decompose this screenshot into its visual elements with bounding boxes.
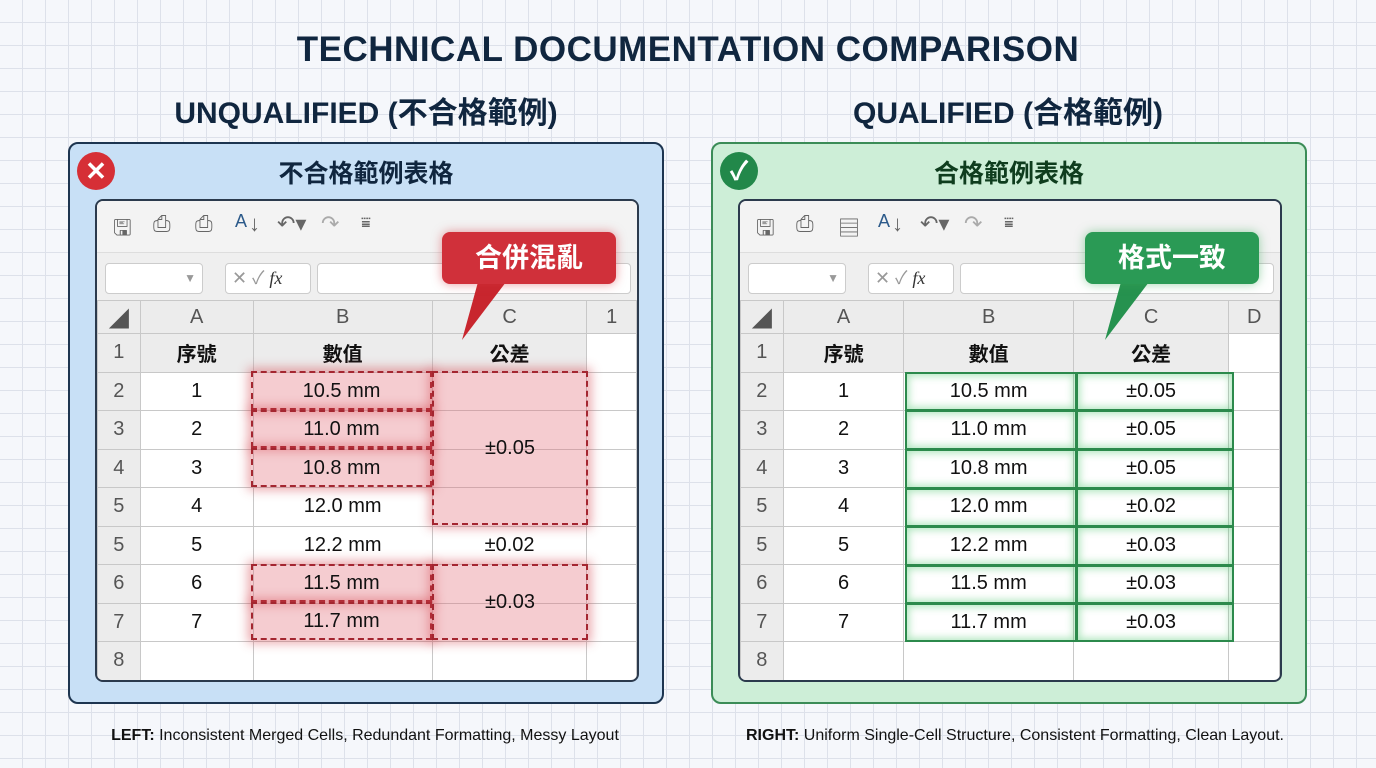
panel: unqualified bbox=[68, 142, 664, 704]
formula bar bbox=[97, 253, 637, 300]
highlight: uniform cells bbox=[905, 372, 1234, 642]
toolbar: ⎙ bbox=[796, 211, 814, 236]
highlight: messy merged cells: 10.8 mm bbox=[303, 457, 380, 479]
table grid: 12.2 mm bbox=[950, 534, 1028, 556]
table grid: 5 bbox=[756, 495, 767, 517]
table grid: 1 bbox=[191, 380, 202, 402]
table grid: 12.0 mm bbox=[304, 495, 382, 517]
table grid: 11.7 mm bbox=[950, 611, 1027, 633]
toolbar bbox=[97, 201, 637, 253]
spreadsheet: qualified bbox=[738, 199, 1282, 682]
formula bar: ✕ ✓ fx bbox=[232, 268, 282, 288]
table grid: 6 bbox=[756, 572, 767, 594]
table grid: 6 bbox=[191, 572, 202, 594]
callout: merge chaos bbox=[435, 225, 623, 340]
table grid: 數值 bbox=[969, 344, 1009, 366]
table grid: 1 bbox=[113, 341, 124, 363]
highlight: messy merged cells bbox=[240, 360, 598, 651]
toolbar: ↓ bbox=[892, 211, 903, 236]
caption: right: RIGHT: Uniform Single-Cell Structure, Consistent Formatting, Clean Layout. bbox=[746, 727, 1284, 744]
table grid: 2 bbox=[113, 380, 124, 402]
highlight: messy merged cells: ±0.03 bbox=[485, 591, 535, 613]
table grid: 4 bbox=[756, 457, 767, 479]
table grid: 7 bbox=[191, 611, 202, 633]
table grid: ±0.03 bbox=[1126, 572, 1176, 594]
table grid: 7 bbox=[756, 611, 767, 633]
table grid: 12.0 mm bbox=[950, 495, 1028, 517]
table grid: 8 bbox=[756, 649, 767, 671]
table grid: 序號 bbox=[177, 344, 217, 366]
table grid: 序號 bbox=[824, 344, 864, 366]
table grid: 5 bbox=[191, 534, 202, 556]
icon: green check badge: ✓ bbox=[730, 156, 748, 186]
table grid: A bbox=[837, 306, 850, 328]
table grid: C bbox=[502, 306, 517, 328]
table grid: 3 bbox=[838, 457, 849, 479]
table grid: 2 bbox=[838, 418, 849, 440]
table grid: 數值 bbox=[323, 344, 363, 366]
panel: qualified bbox=[711, 142, 1307, 704]
panel title: 合格範例表格 bbox=[934, 160, 1084, 188]
icon: red x badge bbox=[77, 152, 115, 190]
toolbar: A bbox=[878, 211, 890, 231]
table grid: 3 bbox=[756, 418, 767, 440]
spreadsheet: unqualified bbox=[95, 199, 639, 682]
table grid: ±0.05 bbox=[1126, 457, 1176, 479]
toolbar: ↷ bbox=[321, 211, 339, 236]
formula bar bbox=[740, 253, 1280, 300]
formula bar: ▼ bbox=[184, 271, 196, 285]
table grid: 4 bbox=[191, 495, 202, 517]
table grid: ◢ bbox=[752, 308, 772, 330]
table grid: 6 bbox=[113, 572, 124, 594]
table grid: 1 bbox=[606, 306, 617, 328]
formula bar: ✕ ✓ fx bbox=[875, 268, 925, 288]
toolbar: ⎙ bbox=[195, 211, 213, 236]
table grid: 3 bbox=[113, 418, 124, 440]
table grid: 2 bbox=[756, 380, 767, 402]
icon: green check badge bbox=[720, 152, 758, 190]
table grid: 7 bbox=[838, 611, 849, 633]
table grid: 8 bbox=[113, 649, 124, 671]
caption: left: LEFT: Inconsistent Merged Cells, Redundant Formatting, Messy Layout bbox=[111, 727, 619, 744]
toolbar: ↶▾ bbox=[277, 211, 306, 236]
table grid: ±0.02 bbox=[485, 534, 535, 556]
toolbar: ↓ bbox=[249, 211, 260, 236]
table grid: ◢ bbox=[109, 308, 129, 330]
toolbar: 🖫 bbox=[113, 215, 132, 240]
table grid: 4 bbox=[838, 495, 849, 517]
table grid: ±0.02 bbox=[1126, 495, 1176, 517]
highlight: messy merged cells: 11.0 mm bbox=[303, 418, 380, 440]
table grid: 11.0 mm bbox=[950, 418, 1027, 440]
highlight: messy merged cells: 10.5 mm bbox=[303, 380, 380, 402]
table grid: 10.5 mm bbox=[950, 380, 1028, 402]
toolbar: ↷ bbox=[964, 211, 982, 236]
table grid: 公差 bbox=[1131, 344, 1171, 366]
table grid: 5 bbox=[756, 534, 767, 556]
table grid: ±0.05 bbox=[1126, 380, 1176, 402]
toolbar bbox=[740, 201, 1280, 253]
callout: consistent format: 格式一致 bbox=[1118, 243, 1226, 273]
toolbar: 🖫 bbox=[756, 215, 775, 240]
table grid: C bbox=[1144, 306, 1158, 328]
toolbar: A bbox=[235, 211, 247, 231]
table grid: 10.8 mm bbox=[950, 457, 1028, 479]
table grid: 11.5 mm bbox=[950, 572, 1027, 594]
subheading: unqualified: UNQUALIFIED (不合格範例) bbox=[174, 97, 558, 130]
table grid bbox=[97, 300, 637, 680]
table grid: 5 bbox=[838, 534, 849, 556]
highlight: messy merged cells: 11.5 mm bbox=[303, 572, 380, 594]
subheading: qualified: QUALIFIED (合格範例) bbox=[853, 97, 1163, 130]
table grid: 2 bbox=[191, 418, 202, 440]
table grid: 5 bbox=[113, 534, 124, 556]
table grid: B bbox=[982, 306, 995, 328]
toolbar: ▤ bbox=[838, 216, 860, 241]
highlight: messy merged cells: 11.7 mm bbox=[303, 610, 380, 632]
table grid: 12.2 mm bbox=[304, 534, 382, 556]
table grid bbox=[740, 300, 1280, 680]
panel title: 不合格範例表格 bbox=[278, 160, 454, 188]
toolbar: ⩸ bbox=[361, 215, 371, 232]
table grid: 3 bbox=[191, 457, 202, 479]
table grid: 4 bbox=[113, 457, 124, 479]
table grid: ±0.05 bbox=[1126, 418, 1176, 440]
table grid: 公差 bbox=[490, 344, 530, 366]
table grid: 6 bbox=[838, 572, 849, 594]
table grid: ±0.03 bbox=[1126, 611, 1176, 633]
title: TECHNICAL DOCUMENTATION COMPARISON bbox=[297, 30, 1079, 69]
callout: merge chaos: 合併混亂 bbox=[475, 243, 583, 273]
table grid: 5 bbox=[113, 495, 124, 517]
toolbar: ⩸ bbox=[1004, 215, 1014, 232]
table grid: 7 bbox=[113, 611, 124, 633]
icon: red x badge: ✕ bbox=[85, 156, 107, 186]
callout: consistent format bbox=[1078, 225, 1266, 340]
formula bar: ▼ bbox=[827, 271, 839, 285]
table grid: ±0.03 bbox=[1126, 534, 1176, 556]
table grid: A bbox=[190, 306, 203, 328]
table grid: 1 bbox=[838, 380, 849, 402]
highlight: messy merged cells: ±0.05 bbox=[485, 437, 535, 459]
table grid: 1 bbox=[756, 341, 767, 363]
toolbar: ⎙ bbox=[153, 211, 171, 236]
toolbar: ↶▾ bbox=[920, 211, 949, 236]
table grid: D bbox=[1247, 306, 1261, 328]
table grid: B bbox=[336, 306, 349, 328]
